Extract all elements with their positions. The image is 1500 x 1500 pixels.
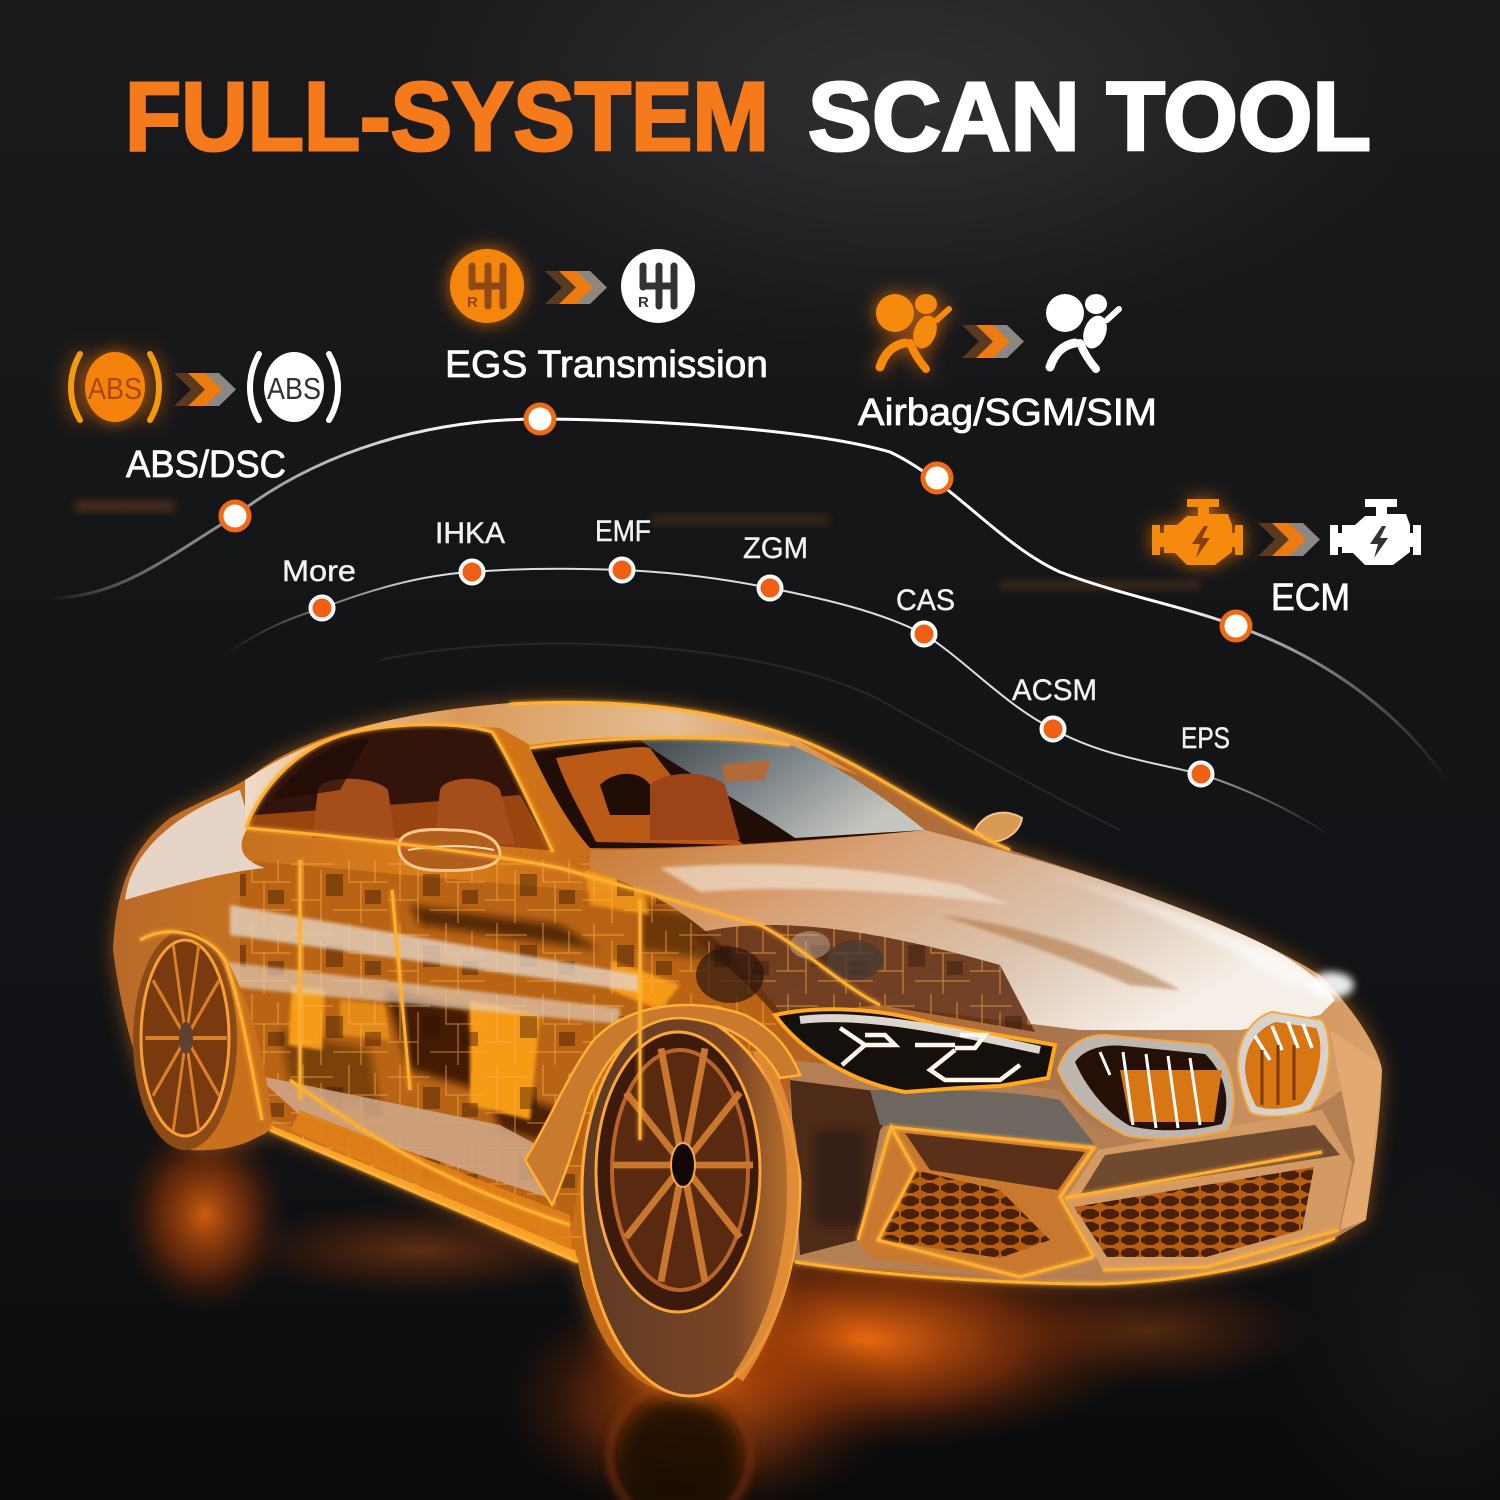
rear quarter highlight: [125, 790, 265, 900]
icon: ABS warning white: [250, 352, 338, 422]
title: FULL-SYSTEM: [125, 62, 769, 171]
node: Airbag: [923, 464, 951, 492]
side window: [246, 725, 550, 850]
small nodes on secondary curve: [310, 558, 1212, 786]
icon: gear white: [621, 249, 695, 323]
bright orange blocks: [288, 870, 680, 1120]
front fascia: [790, 1060, 1372, 1284]
node: EGS Transmission: [526, 405, 554, 433]
headlight: [775, 1009, 1055, 1092]
car: [113, 702, 1382, 1396]
far mirror: [975, 813, 1022, 842]
icon: gear white: R: [638, 294, 649, 311]
icon: gear orange: [450, 249, 524, 323]
main system curve: [50, 419, 1450, 785]
icon: gear orange: R: [467, 294, 478, 311]
arrow: gear: [545, 271, 607, 304]
right fender: [1330, 1030, 1382, 1230]
arrow: ABS: [174, 373, 236, 406]
icon: ABS warning orange: [71, 352, 159, 422]
icon: engine orange: [1152, 499, 1243, 565]
small system labels: IHKA: [435, 517, 505, 550]
heading: ABS/DSC: ABS/DSC: [126, 444, 286, 486]
hood: [590, 830, 1335, 1030]
car body: [113, 702, 1382, 1396]
secondary system curve: [225, 569, 1330, 835]
windshield: [530, 738, 925, 848]
heading: ECM: ECM: [1271, 577, 1350, 619]
heading: EGS Transmission: EGS Transmission: [445, 344, 768, 386]
small system labels: More: [282, 555, 356, 588]
left intake: [858, 1127, 1094, 1277]
small system labels: EPS: [1181, 722, 1230, 755]
glowing outlines: [140, 702, 1339, 1284]
small system labels: EMF: [595, 515, 651, 548]
arrow: airbag: [962, 325, 1024, 358]
small system labels: CAS: [896, 584, 955, 617]
title: SCAN TOOL: [808, 62, 1371, 171]
right kidney grille: [1238, 1012, 1329, 1116]
small system labels: [282, 515, 1230, 755]
title: [125, 62, 1371, 171]
icon: airbag orange: [876, 294, 949, 369]
side panel interior: [227, 860, 784, 1290]
icon: ABS warning white: ABS: [267, 371, 321, 406]
headlight bloom: [1310, 972, 1354, 998]
small system labels: ZGM: [743, 532, 808, 565]
icon: airbag white: [1046, 294, 1119, 369]
icon: ABS warning orange: ABS: [88, 371, 142, 406]
arrow: engine: [1258, 523, 1320, 556]
engine bay: [690, 925, 1035, 1032]
node: ECM: [1222, 612, 1250, 640]
small system labels: ACSM: [1012, 674, 1097, 707]
left kidney grille: [1058, 1035, 1234, 1139]
side mirror: [399, 830, 500, 870]
front fender arch: [525, 1005, 800, 1205]
dark mechanical patches: [280, 905, 790, 1150]
icon: engine white: [1330, 499, 1421, 565]
heading: Airbag/SGM/SIM: Airbag/SGM/SIM: [858, 392, 1157, 434]
front wheel: [582, 1010, 800, 1396]
right intake: [1065, 1110, 1352, 1270]
floor reflections: [120, 1115, 1320, 1500]
roof: [245, 702, 860, 825]
rear wheel: [133, 930, 272, 1150]
node: ABS/DSC: [221, 502, 249, 530]
